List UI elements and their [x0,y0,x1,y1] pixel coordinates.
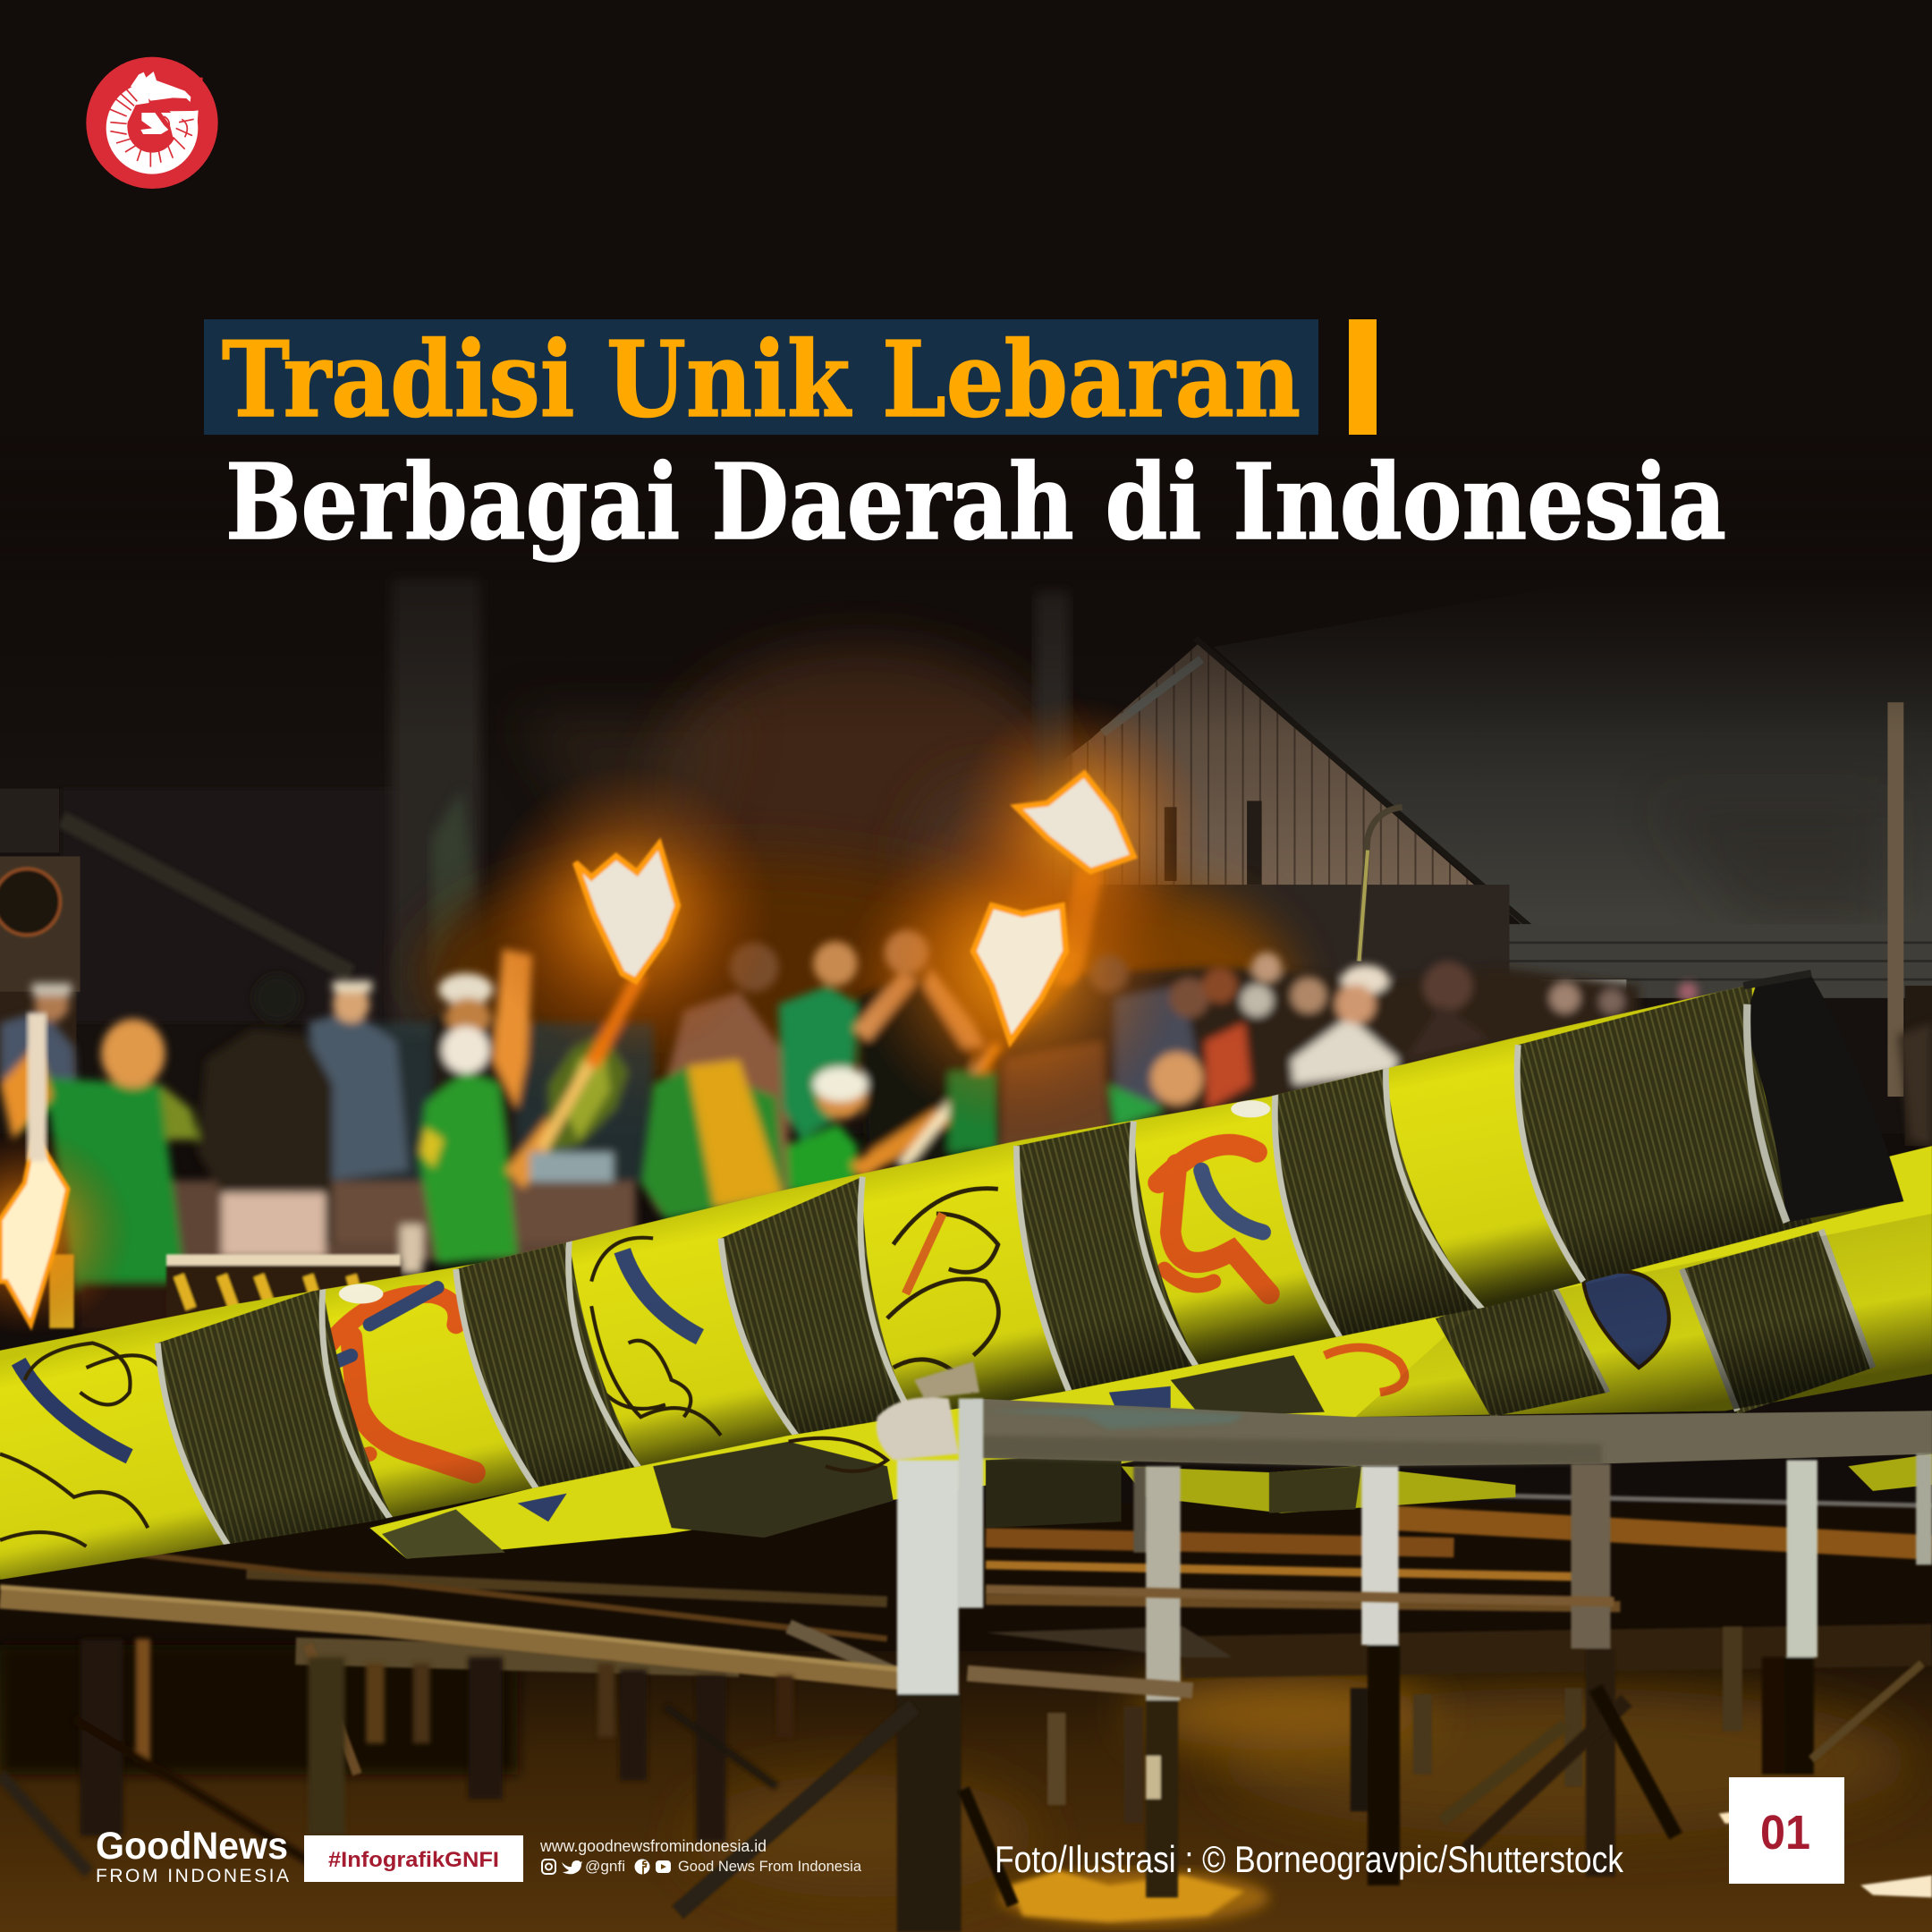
painted ornament orange [323,1284,474,1472]
crowd in the centre [640,869,1090,1220]
log body [0,961,1932,1602]
hashtag box: #InfografikGNFI [328,1848,499,1872]
back painted log [369,1146,1932,1559]
title highlight box [204,319,1318,435]
website and social handles: @gnfi [585,1858,625,1875]
decorative fence [49,1254,401,1328]
left branch and planks [0,1587,900,1775]
background building and house [0,579,1932,1146]
fire glow [0,696,1208,1337]
logo eagle head [131,72,191,102]
braces and planks [678,1589,1922,1912]
water [0,1645,1932,1932]
hashtag box [304,1835,523,1882]
flame two [973,905,1066,1041]
photo credit: Foto/Ilustrasi : © Borneogravpic/Shutterstock [995,1838,1624,1880]
log end cap [1743,973,1903,1223]
crowd on the left [0,949,653,1331]
website and social handles: www.goodnewsfromindonesia.id [539,1837,767,1855]
metal rings [157,1045,1583,1555]
top dark fade [0,0,1932,733]
footer brand: GoodNews [96,1825,288,1868]
footer brand: FROM INDONESIA [96,1866,289,1886]
footer brand [96,1825,289,1886]
flame four [0,1133,68,1325]
main white post [877,1361,983,1932]
main painted log [0,961,1932,1602]
dark piles on the left [0,1639,793,1873]
timber deck with posts [678,1361,1932,1932]
under-deck darkness [0,1504,1932,1664]
left building and speaker [0,579,480,1078]
logo [86,57,218,189]
cross beam [973,1399,1932,1466]
website and social handles [539,1837,862,1875]
background timbers [123,1494,1932,1675]
flames and torches [0,696,1208,1337]
painted ornament orange large [1158,1100,1270,1293]
page number: 01 [1760,1806,1810,1860]
icon: instagram [542,1860,555,1874]
title line one: Tradisi Unik Lebaran [222,319,1301,441]
logo ornament ring [109,78,203,167]
page number [1729,1777,1844,1884]
icon: youtube [656,1860,671,1873]
flame one [575,844,678,981]
white torch handle [27,1013,47,1161]
icon: facebook [635,1859,649,1875]
painted ornament centre blue [591,1238,721,1436]
photo scene [0,579,1932,1932]
smoke and firelight [419,591,1293,1097]
secondary posts [1047,1454,1932,1897]
title line two: Berbagai Daerah di Indonesia [225,442,1726,564]
title accent bar [1349,319,1377,435]
painted ornament centre right [887,1189,998,1393]
painted ornament left [0,1343,160,1546]
website and social handles: Good News From Indonesia [678,1858,862,1875]
crowd on the right [998,953,1932,1152]
icon: twitter [562,1860,582,1874]
wire bands [157,983,1824,1555]
flame three [1016,774,1133,871]
shading over log [0,1181,1884,1580]
